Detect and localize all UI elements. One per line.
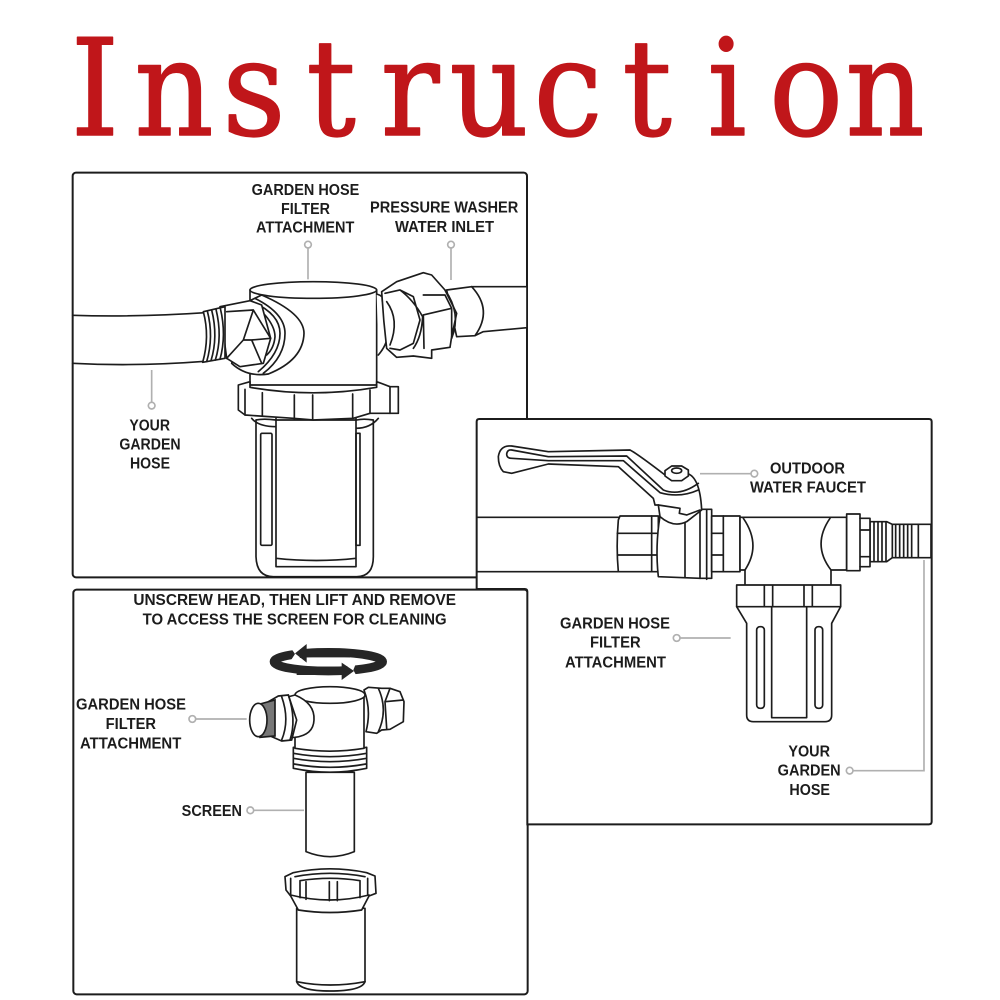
label: your garden hose: YOUR: [788, 743, 830, 760]
tee body: [740, 517, 847, 586]
right connector and nut: [377, 273, 457, 358]
filter jar: [252, 418, 378, 577]
pipe: [478, 517, 658, 572]
head left flange: [277, 695, 314, 738]
label: your garden hose: [119, 418, 181, 472]
label: attachment: GARDEN HOSE: [560, 615, 670, 632]
collar: [238, 382, 398, 420]
label: pressure washer water inlet: PRESSURE WASHER: [370, 200, 518, 217]
head thread: [250, 700, 275, 737]
label: garden hose filter attachment: FILTER: [281, 201, 330, 218]
valve body: [657, 509, 712, 579]
label: your garden hose: GARDEN: [778, 763, 841, 780]
label: outdoor water faucet: OUTDOOR: [770, 460, 845, 477]
lower jar: [297, 908, 365, 991]
hose pipe end: [892, 524, 931, 558]
label: garden hose filter attachment: GARDEN HOSE: [252, 182, 359, 199]
label: attachment: [76, 696, 186, 752]
hose right: [447, 287, 527, 337]
label: your garden hose: YOUR: [129, 418, 170, 435]
collar: [737, 585, 841, 607]
label: pressure washer water inlet: [370, 200, 518, 236]
callout: screen: [247, 807, 304, 814]
garden hose left: [73, 313, 205, 365]
head left nut: [268, 695, 297, 741]
head right nut: [364, 687, 404, 733]
filter body: [250, 282, 377, 385]
label: your garden hose: GARDEN: [119, 436, 181, 453]
label: attachment: ATTACHMENT: [80, 735, 182, 752]
label: attachment: [560, 615, 670, 671]
heading: TO ACCESS THE SCREEN FOR CLEANING: [143, 611, 447, 628]
label: your garden hose: HOSE: [130, 455, 170, 472]
left hex fitting: [203, 295, 304, 375]
female coupling: [617, 516, 658, 572]
lower collar: [285, 869, 376, 912]
callout: attachment: [189, 716, 247, 722]
jar: [737, 607, 841, 722]
label: your garden hose: HOSE: [789, 782, 830, 799]
callout: attachment: [673, 635, 731, 641]
nut right: [847, 514, 870, 571]
label: garden hose filter attachment: ATTACHMENT: [256, 220, 355, 237]
callout: faucet: [700, 470, 758, 477]
label: outdoor water faucet: WATER FAUCET: [750, 479, 866, 496]
panel: filter on outdoor water faucet: [477, 419, 932, 824]
title: Instruction: [71, 11, 925, 167]
threaded base of head: [293, 747, 367, 772]
head body: [295, 687, 365, 751]
label: pressure washer water inlet: WATER INLET: [395, 219, 494, 236]
panel: removing the screen: [73, 590, 528, 994]
icon: rotation arrows: [274, 644, 383, 680]
threaded fitting: [870, 522, 892, 562]
screen: [306, 772, 354, 857]
label: attachment: FILTER: [106, 716, 156, 733]
label: attachment: ATTACHMENT: [565, 654, 666, 671]
label: attachment: FILTER: [590, 635, 641, 652]
callout: hose: [148, 370, 155, 409]
label: outdoor water faucet: [750, 460, 866, 496]
heading: [133, 592, 456, 628]
union nut: [712, 516, 740, 572]
label: garden hose filter attachment: [252, 182, 359, 237]
callout: inlet: [448, 241, 454, 280]
label: screen: SCREEN: [182, 803, 242, 820]
panel: filter connected to garden hose: [73, 173, 527, 577]
heading: UNSCREW HEAD, THEN LIFT AND REMOVE: [133, 592, 456, 609]
valve handle: [498, 446, 702, 524]
label: attachment: GARDEN HOSE: [76, 696, 186, 713]
callout: attachment: [305, 241, 311, 279]
label: your garden hose: [778, 743, 841, 799]
callout: hose: [846, 560, 924, 774]
valve stem: [665, 466, 688, 481]
